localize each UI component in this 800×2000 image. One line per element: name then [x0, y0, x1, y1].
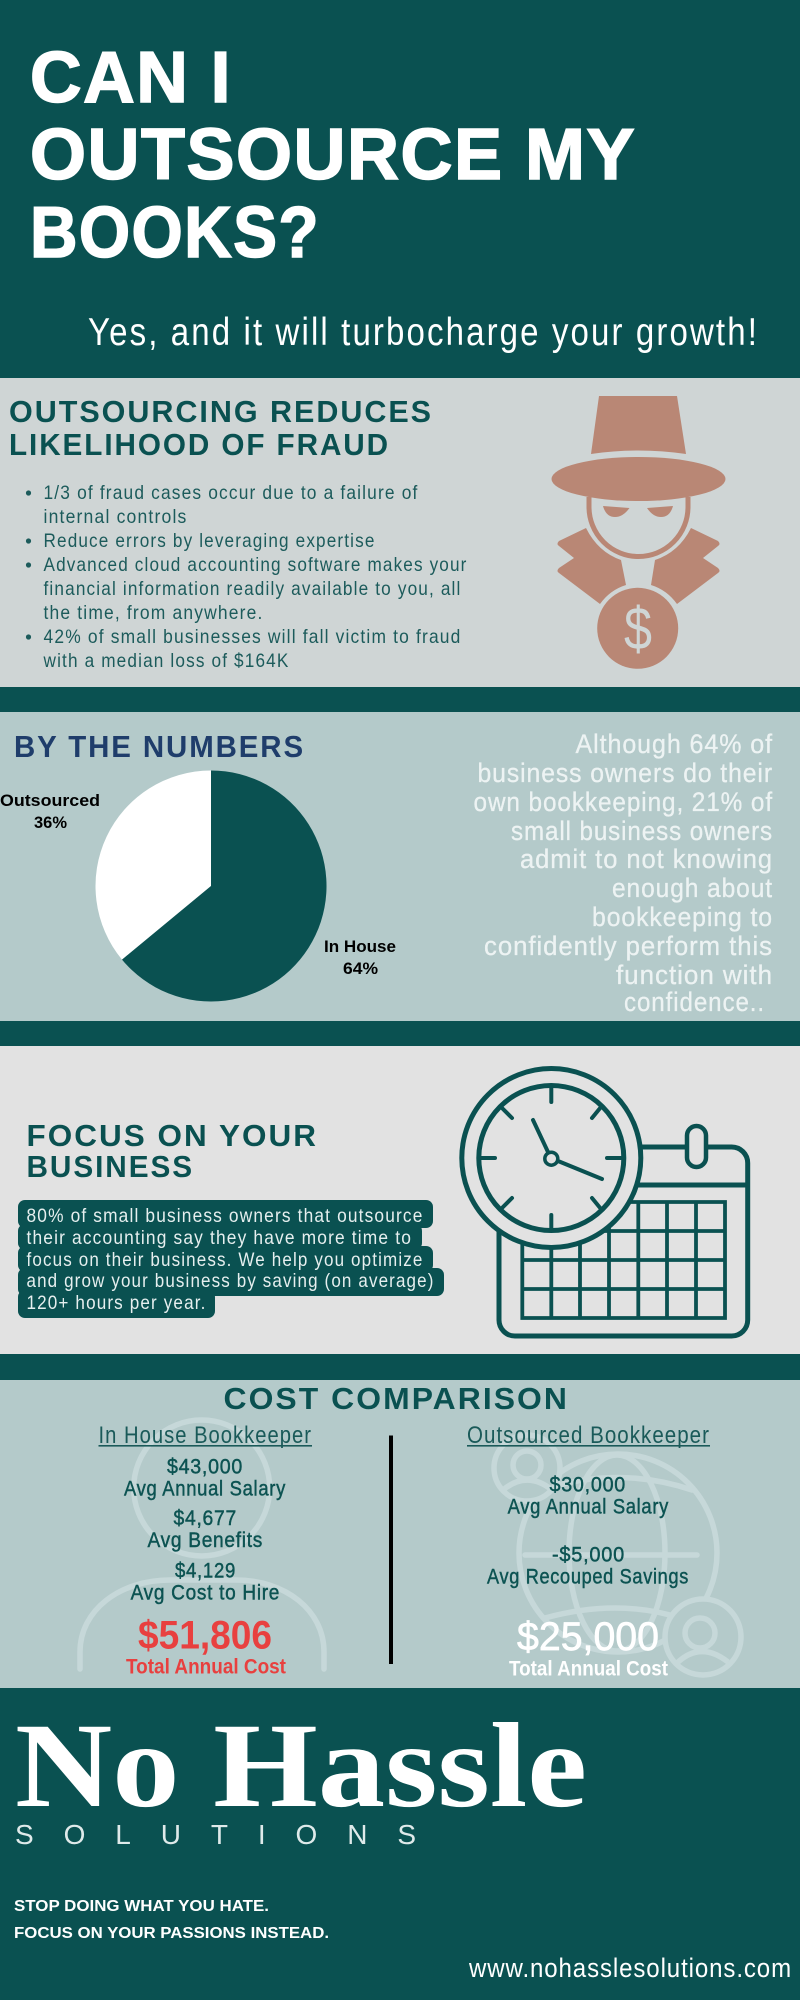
- column: outsourced bookkeeper: Avg Annual Salary: [508, 1494, 669, 1518]
- icon: spy with dollar coin: $: [624, 595, 652, 662]
- pie chart: [96, 770, 327, 1002]
- column: outsourced bookkeeper: $30,000: [550, 1472, 626, 1496]
- column: in house bookkeeper: [98, 1422, 312, 1678]
- tagline: FOCUS ON YOUR PASSIONS INSTEAD.: [14, 1925, 329, 1942]
- column: outsourced bookkeeper: [467, 1422, 710, 1680]
- title: [30, 38, 636, 273]
- text block: bookkeeping statistic: small business owners: [511, 816, 773, 846]
- callout: time saved: their accounting say they have more time to: [26, 1227, 412, 1249]
- tagline: STOP DOING WHAT YOU HATE.: [14, 1898, 269, 1915]
- callout: time saved: [18, 1200, 444, 1318]
- text block: bookkeeping statistic: business owners do their: [478, 758, 773, 788]
- text block: bookkeeping statistic: confidently perform this: [484, 931, 773, 961]
- title: BOOKS?: [30, 193, 320, 273]
- pie label: outsourced: 36%: [34, 814, 67, 832]
- bullet list: with a median loss of $164K: [43, 650, 289, 672]
- text block: bookkeeping statistic: own bookkeeping, 21% of: [474, 787, 773, 817]
- divider: columns: [389, 1436, 393, 1664]
- text block: bookkeeping statistic: admit to not knowing: [520, 844, 773, 874]
- heading: focus: FOCUS ON YOUR: [26, 1118, 318, 1153]
- icon: clock and calendar: [462, 1068, 748, 1336]
- column: in house bookkeeper: $4,677: [174, 1506, 237, 1530]
- heading: by the numbers: BY THE NUMBERS: [14, 729, 305, 764]
- watermark: person icon: [80, 1420, 324, 1669]
- text block: bookkeeping statistic: bookkeeping to: [592, 902, 773, 932]
- panel: cost comparison: [0, 1380, 800, 1688]
- heading: fraud: [9, 394, 433, 462]
- bullet list: 42% of small businesses will fall victim to fraud: [44, 626, 462, 648]
- text block: bookkeeping statistic: function with: [616, 960, 773, 990]
- column: in house bookkeeper: $4,129: [175, 1558, 236, 1582]
- column: in house bookkeeper: $43,000: [167, 1454, 243, 1478]
- pie label: outsourced: Outsourced: [0, 792, 100, 810]
- bullet list: the time, from anywhere.: [44, 602, 264, 624]
- bullet list: Advanced cloud accounting software makes your: [44, 554, 468, 576]
- tagline: [14, 1898, 329, 1942]
- callout: time saved: and grow your business by saving (on average): [26, 1270, 434, 1292]
- column: outsourced bookkeeper: Avg Recouped Savings: [487, 1565, 689, 1589]
- watermark: globe with people: [494, 1435, 741, 1675]
- panel: header: [0, 0, 800, 378]
- text block: bookkeeping statistic: enough about: [612, 873, 773, 903]
- icon: spy with dollar coin: [552, 396, 726, 669]
- heading: focus: [26, 1118, 318, 1184]
- bullet list: Reduce errors by leveraging expertise: [44, 530, 376, 552]
- text block: bookkeeping statistic: confidence..: [624, 987, 765, 1017]
- bullet list: financial information readily available to you, all: [44, 578, 462, 600]
- pie label: in house: [324, 938, 396, 978]
- column: in house bookkeeper: $51,806: [138, 1614, 272, 1658]
- logo wordmark: No Hassle: [15, 1699, 587, 1833]
- column: in house bookkeeper: In House Bookkeeper: [98, 1422, 312, 1449]
- bullet list: [26, 482, 468, 672]
- title: OUTSOURCE MY: [30, 115, 636, 195]
- pie label: in house: 64%: [343, 960, 378, 978]
- bullet list: 1/3 of fraud cases occur due to a failure of: [44, 482, 418, 504]
- bullet list: internal controls: [44, 506, 188, 528]
- heading: focus: BUSINESS: [26, 1149, 194, 1184]
- panel: fraud: [0, 378, 800, 687]
- column: outsourced bookkeeper: Total Annual Cost: [509, 1658, 668, 1680]
- text block: bookkeeping statistic: Although 64% of: [576, 729, 773, 759]
- column: in house bookkeeper: Avg Benefits: [148, 1528, 263, 1552]
- title: CAN I: [30, 38, 232, 118]
- callout: time saved: 80% of small business owners that outsource: [26, 1205, 424, 1227]
- pie label: in house: In House: [324, 938, 396, 956]
- heading: cost comparison: COST COMPARISON: [224, 1381, 569, 1416]
- logo subtitle: SOLUTIONS: [15, 1819, 416, 1850]
- column: in house bookkeeper: Total Annual Cost: [126, 1656, 286, 1678]
- panel: focus on your business: [0, 1046, 800, 1354]
- pie label: outsourced: [0, 792, 100, 832]
- heading: fraud: OUTSOURCING REDUCES: [9, 394, 433, 429]
- column: in house bookkeeper: Avg Cost to Hire: [131, 1581, 280, 1605]
- callout: time saved: focus on their business. We help you optimize: [26, 1249, 424, 1271]
- panel: footer: [0, 1688, 800, 2000]
- text block: bookkeeping statistic: [474, 729, 773, 1017]
- column: outsourced bookkeeper: Outsourced Bookkeeper: [467, 1422, 710, 1449]
- heading: fraud: LIKELIHOOD OF FRAUD: [9, 427, 390, 462]
- callout: time saved: 120+ hours per year.: [26, 1292, 206, 1314]
- column: outsourced bookkeeper: $25,000: [517, 1615, 659, 1659]
- column: outsourced bookkeeper: -$5,000: [552, 1543, 625, 1567]
- panel: by the numbers: [0, 712, 800, 1021]
- column: in house bookkeeper: Avg Annual Salary: [124, 1476, 286, 1500]
